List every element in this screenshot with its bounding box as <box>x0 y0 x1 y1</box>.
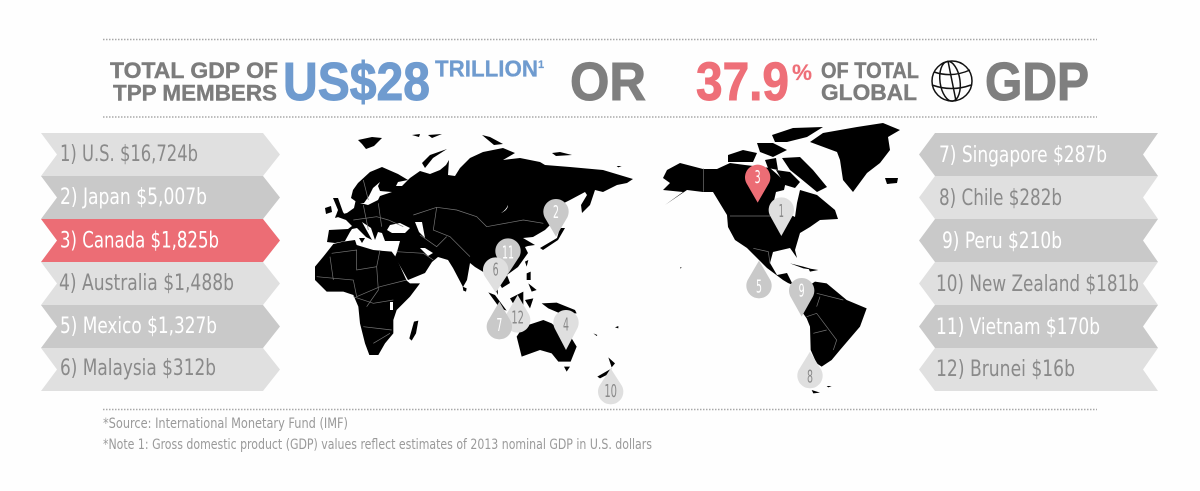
rank 5: Mexico <box>41 305 280 348</box>
heading: total GDP of TPP members <box>110 58 278 106</box>
rank 10: New Zealand: 10) New Zealand $181b <box>936 272 1139 297</box>
heading: of total global: OF TOTAL <box>821 58 919 83</box>
rank 11: Vietnam: 11) Vietnam $170b <box>936 315 1100 340</box>
heading: total GDP of TPP members: TPP MEMBERS <box>113 80 277 106</box>
white seas <box>387 205 508 310</box>
pin 10 <box>598 368 623 404</box>
pin 6: 6 <box>493 260 499 281</box>
footnotes: *Note 1: Gross domestic product (GDP) values reflect estimates of 2013 nominal GDP in U.S. dollars <box>103 437 652 453</box>
pin 5: 5 <box>756 276 762 297</box>
headline figure: US$28 trillion <box>283 52 544 112</box>
pin 12: 12 <box>511 308 524 329</box>
rank 3: Canada: 3) Canada $1,825b <box>60 228 219 254</box>
rank 8: Chile: 8) Chile $282b <box>939 186 1062 211</box>
map pins: Americas <box>745 165 823 388</box>
pin 2 <box>543 199 569 237</box>
map: Americas <box>663 123 900 393</box>
rank 5: Mexico: 5) Mexico $1,327b <box>60 314 217 339</box>
country borders <box>703 168 843 350</box>
country borders <box>317 180 543 343</box>
rank 1: U.S. <box>41 133 280 176</box>
list panel: TPP members 1 to 6 <box>41 133 280 391</box>
rank 6: Malaysia <box>41 348 280 391</box>
heading: GDP: GDP <box>985 52 1089 112</box>
pin 8: 8 <box>807 366 813 387</box>
pin 9 <box>789 278 814 317</box>
rank 12: Brunei: 12) Brunei $16b <box>936 357 1075 382</box>
pin 9: 9 <box>799 281 805 302</box>
pin 8 <box>797 352 823 388</box>
pin 1: 1 <box>779 201 784 222</box>
pin 4: 4 <box>563 315 569 336</box>
rank 6: Malaysia: 6) Malaysia $312b <box>60 356 216 381</box>
map pins: Asia-Pacific <box>483 199 623 404</box>
rank 2: Japan: 2) Japan $5,007b <box>60 185 207 210</box>
heading: of total global: GLOBAL <box>821 80 917 105</box>
pin 5 <box>746 261 772 298</box>
rank 3: Canada <box>41 219 280 262</box>
map: Europe, Asia, Africa and Oceania <box>315 134 633 378</box>
pin 4 <box>553 310 579 350</box>
pin 12 <box>505 295 530 333</box>
rank 11: Vietnam <box>919 305 1158 348</box>
pin 7 <box>487 302 512 339</box>
heading: of total global <box>821 58 919 105</box>
rank 8: Chile <box>919 176 1158 219</box>
pin 1 <box>769 197 794 236</box>
rank 12: Brunei <box>919 348 1158 391</box>
pin 3: 3 <box>755 167 761 188</box>
heading: OR: OR <box>570 52 646 112</box>
rank 9: Peru <box>919 219 1158 262</box>
heading: total GDP of TPP members: TOTAL GDP OF <box>110 58 278 83</box>
pin 7: 7 <box>496 315 502 336</box>
pin 3 <box>745 165 770 203</box>
pin 6 <box>483 257 508 293</box>
headline figure: 37.9 percent: 37.9 <box>696 52 789 112</box>
rank 9: Peru: 9) Peru $210b <box>942 229 1062 254</box>
headline figure: US$28 trillion: 1 <box>538 59 544 71</box>
rank 10: New Zealand <box>919 262 1158 305</box>
pin 2: 2 <box>553 202 559 223</box>
rank 1: U.S.: 1) U.S. $16,724b <box>60 142 198 167</box>
rank 4: Australia: 4) Australia $1,488b <box>59 271 234 296</box>
pin 11 <box>495 238 521 274</box>
rank 2: Japan <box>41 176 280 219</box>
list panel: TPP members 7 to 12 <box>919 133 1158 391</box>
footnotes <box>103 416 652 453</box>
headline figure: US$28 trillion: TRILLION <box>435 56 538 82</box>
pin 10: 10 <box>604 381 617 402</box>
rank 4: Australia <box>41 262 280 305</box>
rank 7: Singapore <box>919 133 1158 176</box>
headline figure: 37.9 percent: % <box>792 60 812 85</box>
pin 11: 11 <box>502 243 514 264</box>
icon: globe <box>932 60 972 102</box>
headline figure: US$28 trillion: US$28 <box>283 52 430 112</box>
footnotes: *Source: International Monetary Fund (IMF) <box>103 416 348 432</box>
rank 7: Singapore: 7) Singapore $287b <box>939 143 1107 168</box>
